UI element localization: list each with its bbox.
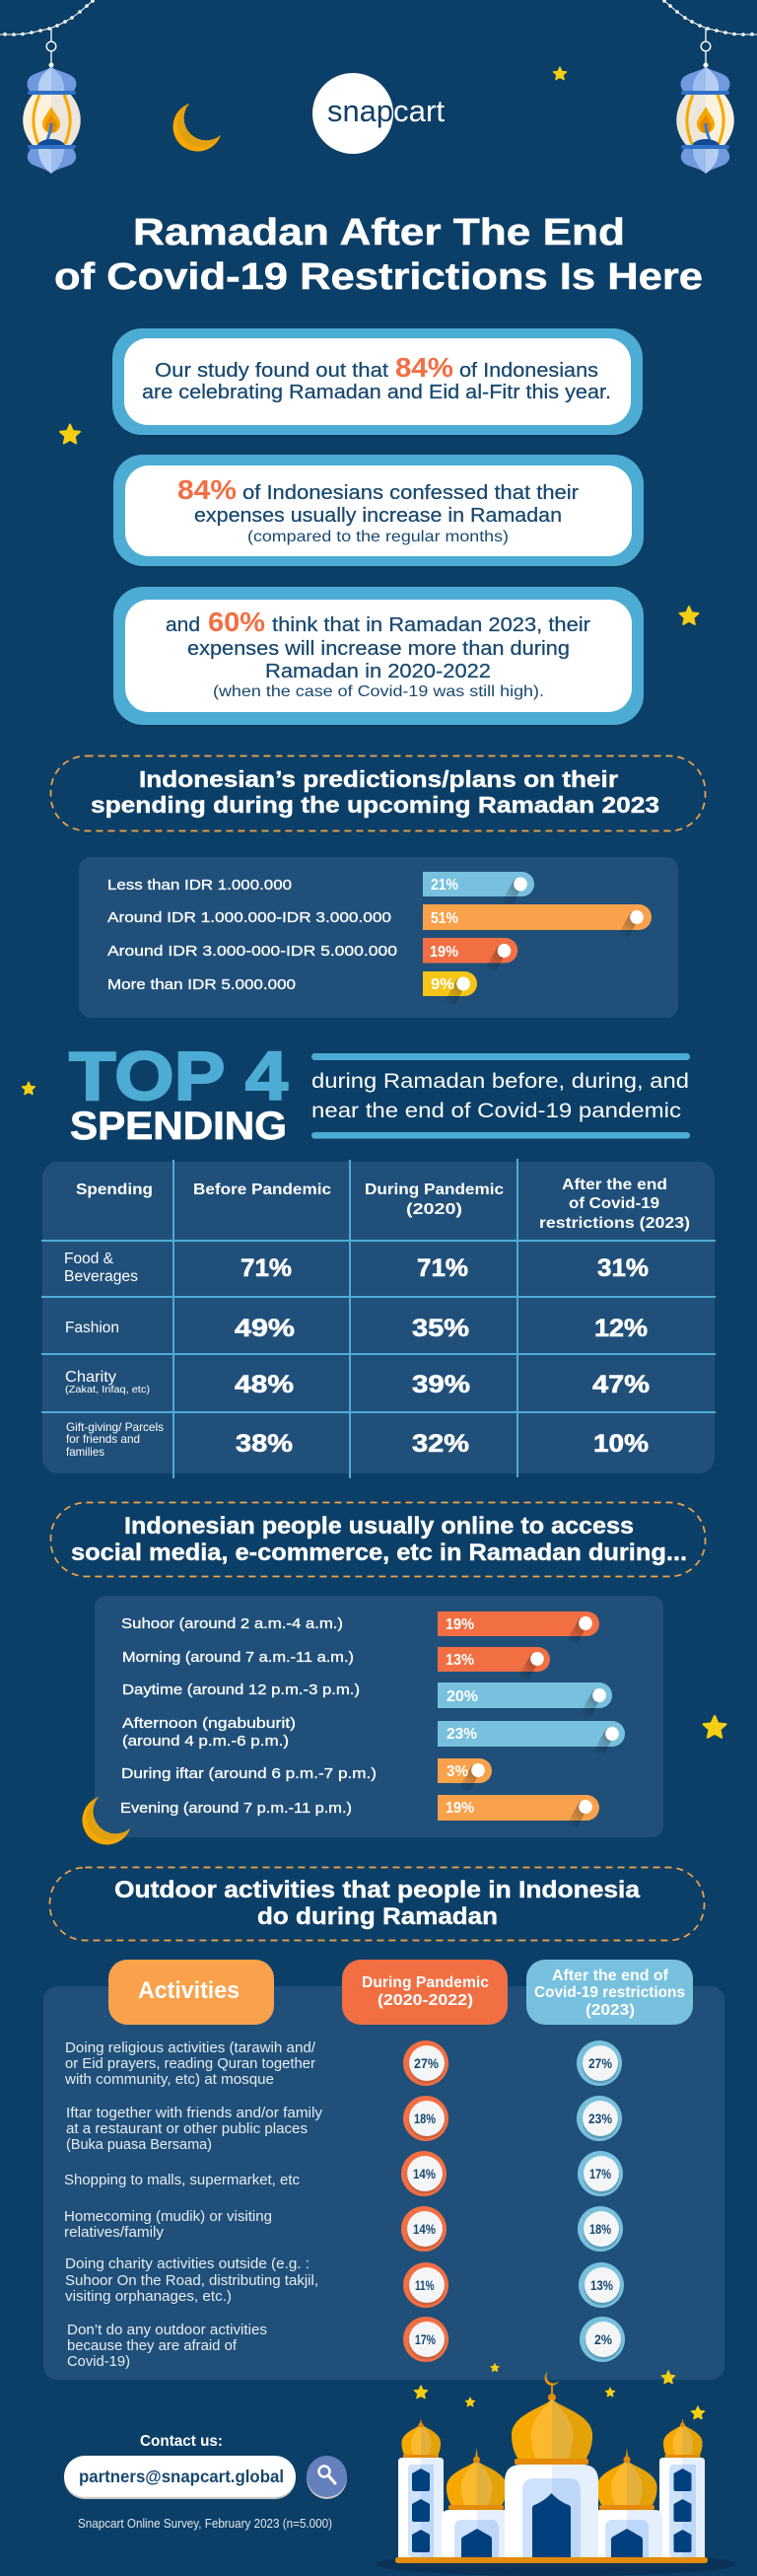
row: iftar together	[66, 2096, 622, 2153]
row: charity: Charity	[65, 1369, 116, 1386]
finial moon	[544, 2372, 559, 2386]
bar: afternoon: 23%	[447, 1726, 477, 1743]
bar: suhoor: Suhoor (around 2 a.m.-4 a.m.)	[121, 1615, 343, 1632]
bar: less than IDR 1.000.000: 21%	[431, 877, 458, 894]
row: homecoming: Homecoming (mudik) or visiting	[64, 2209, 272, 2225]
table header: Before Pandemic	[193, 1181, 331, 1198]
callout: 84% celebrating: are celebrating Ramadan and Eid al-Fitr this year.	[142, 382, 611, 403]
callout: 84% expenses increase: (compared to the regular months)	[247, 529, 509, 545]
callout: 60% expenses more: and	[166, 614, 200, 636]
bar: evening: 19%	[446, 1800, 474, 1817]
icon: search	[307, 2456, 347, 2499]
row: homecoming: relatives/family	[64, 2225, 165, 2241]
row: iftar together: Iftar together with friends and/or family	[66, 2106, 323, 2121]
row: fashion	[65, 1315, 648, 1342]
snapcart logo: snap	[327, 94, 393, 128]
bar: morning: Morning (around 7 a.m.-11 a.m.)	[122, 1649, 354, 1666]
title	[54, 212, 703, 298]
callout: 84% celebrating: Our study found out that	[155, 360, 388, 382]
right minaret	[659, 2458, 705, 2557]
title: Ramadan After The End	[133, 212, 625, 253]
bar: around IDR 3.000.000-5.000.000	[107, 938, 517, 971]
header: during pandemic: During Pandemic	[362, 1974, 489, 1991]
star left of callouts	[60, 424, 80, 444]
heading: TOP 4 SPENDING	[69, 1038, 288, 1148]
heading: online times	[51, 1503, 706, 1576]
left side hall	[442, 2510, 512, 2557]
header: after restrictions: After the end of	[552, 1968, 669, 1984]
row: charity: (Zakat, Infaq, etc)	[65, 1384, 150, 1395]
bar: more than IDR 5.000.000: More than IDR 5.000.000	[107, 977, 296, 993]
row: fashion: 49%	[235, 1315, 295, 1342]
row: no outdoor activities: Covid-19)	[67, 2354, 130, 2370]
row: iftar together: 23%	[588, 2111, 612, 2126]
header: after restrictions: (2023)	[585, 2002, 635, 2019]
bar: evening	[120, 1795, 599, 1827]
header: during pandemic	[342, 1960, 508, 2025]
crescent moon top	[172, 104, 221, 152]
star right of online panel	[704, 1716, 725, 1738]
row: charity activities: 13%	[590, 2278, 613, 2293]
heading: online times: social media, e-commerce, etc in Ramadan during...	[71, 1539, 687, 1566]
callout: 60% expenses more: (when the case of Covid-19 was still high).	[213, 683, 544, 700]
bar: suhoor	[121, 1611, 599, 1644]
row: iftar together: 18%	[414, 2111, 436, 2126]
heading: outdoor activities: do during Ramadan	[257, 1903, 498, 1930]
row: charity activities: Suhoor On the Road, distributing takjil,	[65, 2273, 318, 2289]
bar: around IDR 1.000.000-3.000.000: 51%	[431, 910, 458, 927]
row: shopping: 14%	[413, 2167, 436, 2182]
row: religious activities: 27%	[414, 2056, 439, 2071]
bar: around IDR 3.000.000-5.000.000: 19%	[430, 944, 458, 961]
row: fashion: 35%	[412, 1315, 469, 1342]
table header: During Pandemic	[365, 1181, 504, 1198]
bar: more than IDR 5.000.000: 9%	[431, 976, 454, 993]
table header: of Covid-19	[569, 1195, 659, 1212]
row: charity: 47%	[592, 1371, 650, 1398]
header: activities: Activities	[138, 1977, 240, 2004]
row: homecoming: 18%	[589, 2222, 611, 2237]
callout: 60% expenses more	[113, 587, 644, 727]
title: of Covid-19 Restrictions Is Here	[54, 256, 703, 298]
row: charity activities: 11%	[415, 2278, 434, 2293]
bar: less than IDR 1.000.000	[107, 872, 534, 905]
row: food and beverages	[64, 1251, 649, 1285]
star left of TOP 4	[22, 1082, 35, 1095]
table header	[76, 1177, 690, 1232]
callout: 84% expenses increase	[113, 455, 644, 568]
row: charity: 39%	[412, 1371, 470, 1398]
right side hall	[591, 2510, 662, 2557]
row: religious activities	[64, 2040, 622, 2088]
table header: (2020)	[406, 1201, 462, 1218]
row: food and beverages: 31%	[597, 1254, 649, 1282]
row: no outdoor activities: Don’t do any outdoor activities	[67, 2323, 267, 2338]
bar: around IDR 3.000.000-5.000.000: Around IDR 3.000-000-IDR 5.000.000	[107, 944, 397, 960]
bar: iftar: During iftar (around 6 p.m.-7 p.m.)	[121, 1765, 377, 1782]
star top	[553, 67, 567, 80]
crescent moon near evening row	[82, 1797, 130, 1845]
row: religious activities: Doing religious activities (tarawih and/	[65, 2040, 316, 2056]
table header: Spending	[76, 1181, 153, 1198]
row: gift-giving	[66, 1420, 649, 1459]
bar: morning	[122, 1647, 550, 1680]
callout: 60% expenses more: Ramadan in 2020-2022	[265, 661, 491, 682]
callout: 60% expenses more: expenses will increase more than during	[187, 638, 570, 660]
panel: outdoor activities	[43, 1960, 724, 2380]
bar: afternoon: (around 4 p.m.-6 p.m.)	[122, 1733, 289, 1750]
email pill: partners@snapcart.global	[79, 2467, 284, 2486]
callout: 84% celebrating	[112, 328, 643, 437]
snapcart logo	[312, 73, 445, 154]
row: gift-giving: 38%	[236, 1430, 293, 1458]
row: charity: 48%	[235, 1371, 294, 1398]
heading: online times: Indonesian people usually online to access	[124, 1513, 634, 1539]
subheading: during Ramadan	[311, 1053, 690, 1138]
row: homecoming: 14%	[413, 2222, 436, 2237]
header: during pandemic: (2020-2022)	[378, 1992, 473, 2009]
row: gift-giving: for friends and	[66, 1432, 140, 1446]
callout: 84% celebrating: 84%	[395, 352, 453, 383]
mosque illustration	[376, 2372, 736, 2576]
heading: TOP 4 SPENDING: SPENDING	[70, 1105, 287, 1148]
heading: spending predictions	[51, 755, 706, 830]
bar: around IDR 1.000.000-3.000.000: Around IDR 1.000.000-IDR 3.000.000	[107, 910, 391, 926]
row: shopping	[64, 2151, 623, 2196]
row: no outdoor activities: 2%	[594, 2332, 612, 2347]
table: top 4 spending	[41, 1159, 716, 1478]
stars around mosque	[414, 2363, 705, 2419]
right lantern with garland	[662, 0, 757, 174]
bar: daytime: 20%	[447, 1688, 478, 1705]
row: food and beverages: 71%	[417, 1254, 468, 1282]
contact us	[64, 2433, 347, 2499]
row: charity activities	[65, 2256, 624, 2308]
callout: 84% expenses increase: 84%	[177, 474, 237, 505]
row: charity	[65, 1369, 650, 1398]
row: shopping: 17%	[589, 2167, 611, 2182]
row: gift-giving: Gift-giving/ Parcels	[66, 1420, 164, 1434]
callout: 84% celebrating: of Indonesians	[459, 360, 598, 382]
left minaret	[398, 2458, 444, 2557]
bar: afternoon: Afternoon (ngabuburit)	[122, 1715, 296, 1732]
row: gift-giving: 10%	[593, 1430, 649, 1458]
row: gift-giving: families	[66, 1445, 104, 1459]
callout: 84% expenses increase: expenses usually increase in Ramadan	[194, 505, 562, 527]
heading: outdoor activities	[49, 1868, 704, 1941]
callout: 84% expenses increase: of Indonesians confessed that their	[242, 482, 579, 504]
row: food and beverages: Beverages	[64, 1268, 138, 1285]
bar: less than IDR 1.000.000: Less than IDR 1.000.000	[107, 878, 292, 894]
row: food and beverages: 71%	[241, 1254, 292, 1282]
bar: more than IDR 5.000.000	[107, 971, 477, 1004]
row: religious activities: or Eid prayers, reading Quran together	[65, 2056, 315, 2072]
row: no outdoor activities: 17%	[415, 2332, 436, 2347]
left lantern with garland	[0, 0, 95, 174]
header: after restrictions: Covid-19 restrictions	[534, 1984, 685, 2001]
row: religious activities: 27%	[588, 2056, 612, 2071]
central hall and dome	[505, 2465, 598, 2557]
row: homecoming	[64, 2206, 623, 2252]
snapcart logo: cart	[393, 94, 445, 128]
row: iftar together: at a restaurant or other public places	[66, 2121, 308, 2137]
row: gift-giving: 32%	[412, 1430, 469, 1458]
contact us: Contact us:	[140, 2433, 223, 2450]
heading: outdoor activities: Outdoor activities that people in Indonesia	[114, 1877, 641, 1903]
bar: evening: Evening (around 7 p.m.-11 p.m.)	[120, 1800, 352, 1817]
heading: spending predictions: Indonesian’s predictions/plans on their	[139, 766, 618, 792]
bar: iftar: 3%	[447, 1763, 468, 1780]
bar: suhoor: 19%	[446, 1616, 474, 1633]
table header: After the end	[562, 1177, 667, 1193]
panel: online time bars	[95, 1596, 663, 1837]
row: no outdoor activities	[67, 2317, 625, 2370]
row: fashion: Fashion	[65, 1320, 119, 1336]
table header: restrictions (2023)	[539, 1215, 690, 1232]
header: activities	[108, 1960, 274, 2025]
subheading: during Ramadan: during Ramadan before, during, and	[311, 1069, 689, 1093]
row: iftar together: (Buka puasa Bersama)	[66, 2137, 212, 2153]
row: religious activities: with community, etc) at mosque	[64, 2072, 274, 2088]
row: charity activities: visiting orphanages, etc.)	[65, 2289, 232, 2305]
star right of callouts	[680, 607, 698, 624]
bar: morning: 13%	[446, 1652, 474, 1669]
callout: 60% expenses more: think that in Ramadan 2023, their	[272, 614, 590, 636]
bar: daytime: Daytime (around 12 p.m.-3 p.m.)	[122, 1682, 360, 1698]
header: after restrictions	[526, 1960, 693, 2025]
email pill	[64, 2456, 296, 2499]
bar: daytime	[122, 1682, 612, 1716]
row: charity activities: Doing charity activities outside (e.g. :	[65, 2256, 310, 2272]
row: shopping: Shopping to malls, supermarket, etc	[64, 2173, 300, 2188]
subheading: during Ramadan: near the end of Covid-19 pandemic	[311, 1099, 681, 1122]
bar: afternoon	[122, 1715, 625, 1754]
heading: spending predictions: spending during the upcoming Ramadan 2023	[91, 792, 659, 818]
bar: around IDR 1.000.000-3.000.000	[107, 904, 652, 938]
callout: 60% expenses more: 60%	[208, 607, 265, 637]
source note: Snapcart Online Survey, February 2023 (n=5.000)	[78, 2517, 332, 2531]
heading: TOP 4 SPENDING: TOP 4	[69, 1038, 288, 1114]
row: no outdoor activities: because they are afraid of	[67, 2338, 238, 2354]
bar: iftar	[121, 1758, 492, 1791]
row: food and beverages: Food &	[64, 1251, 114, 1267]
row: fashion: 12%	[594, 1315, 648, 1342]
panel: spending plan bars	[79, 857, 678, 1018]
